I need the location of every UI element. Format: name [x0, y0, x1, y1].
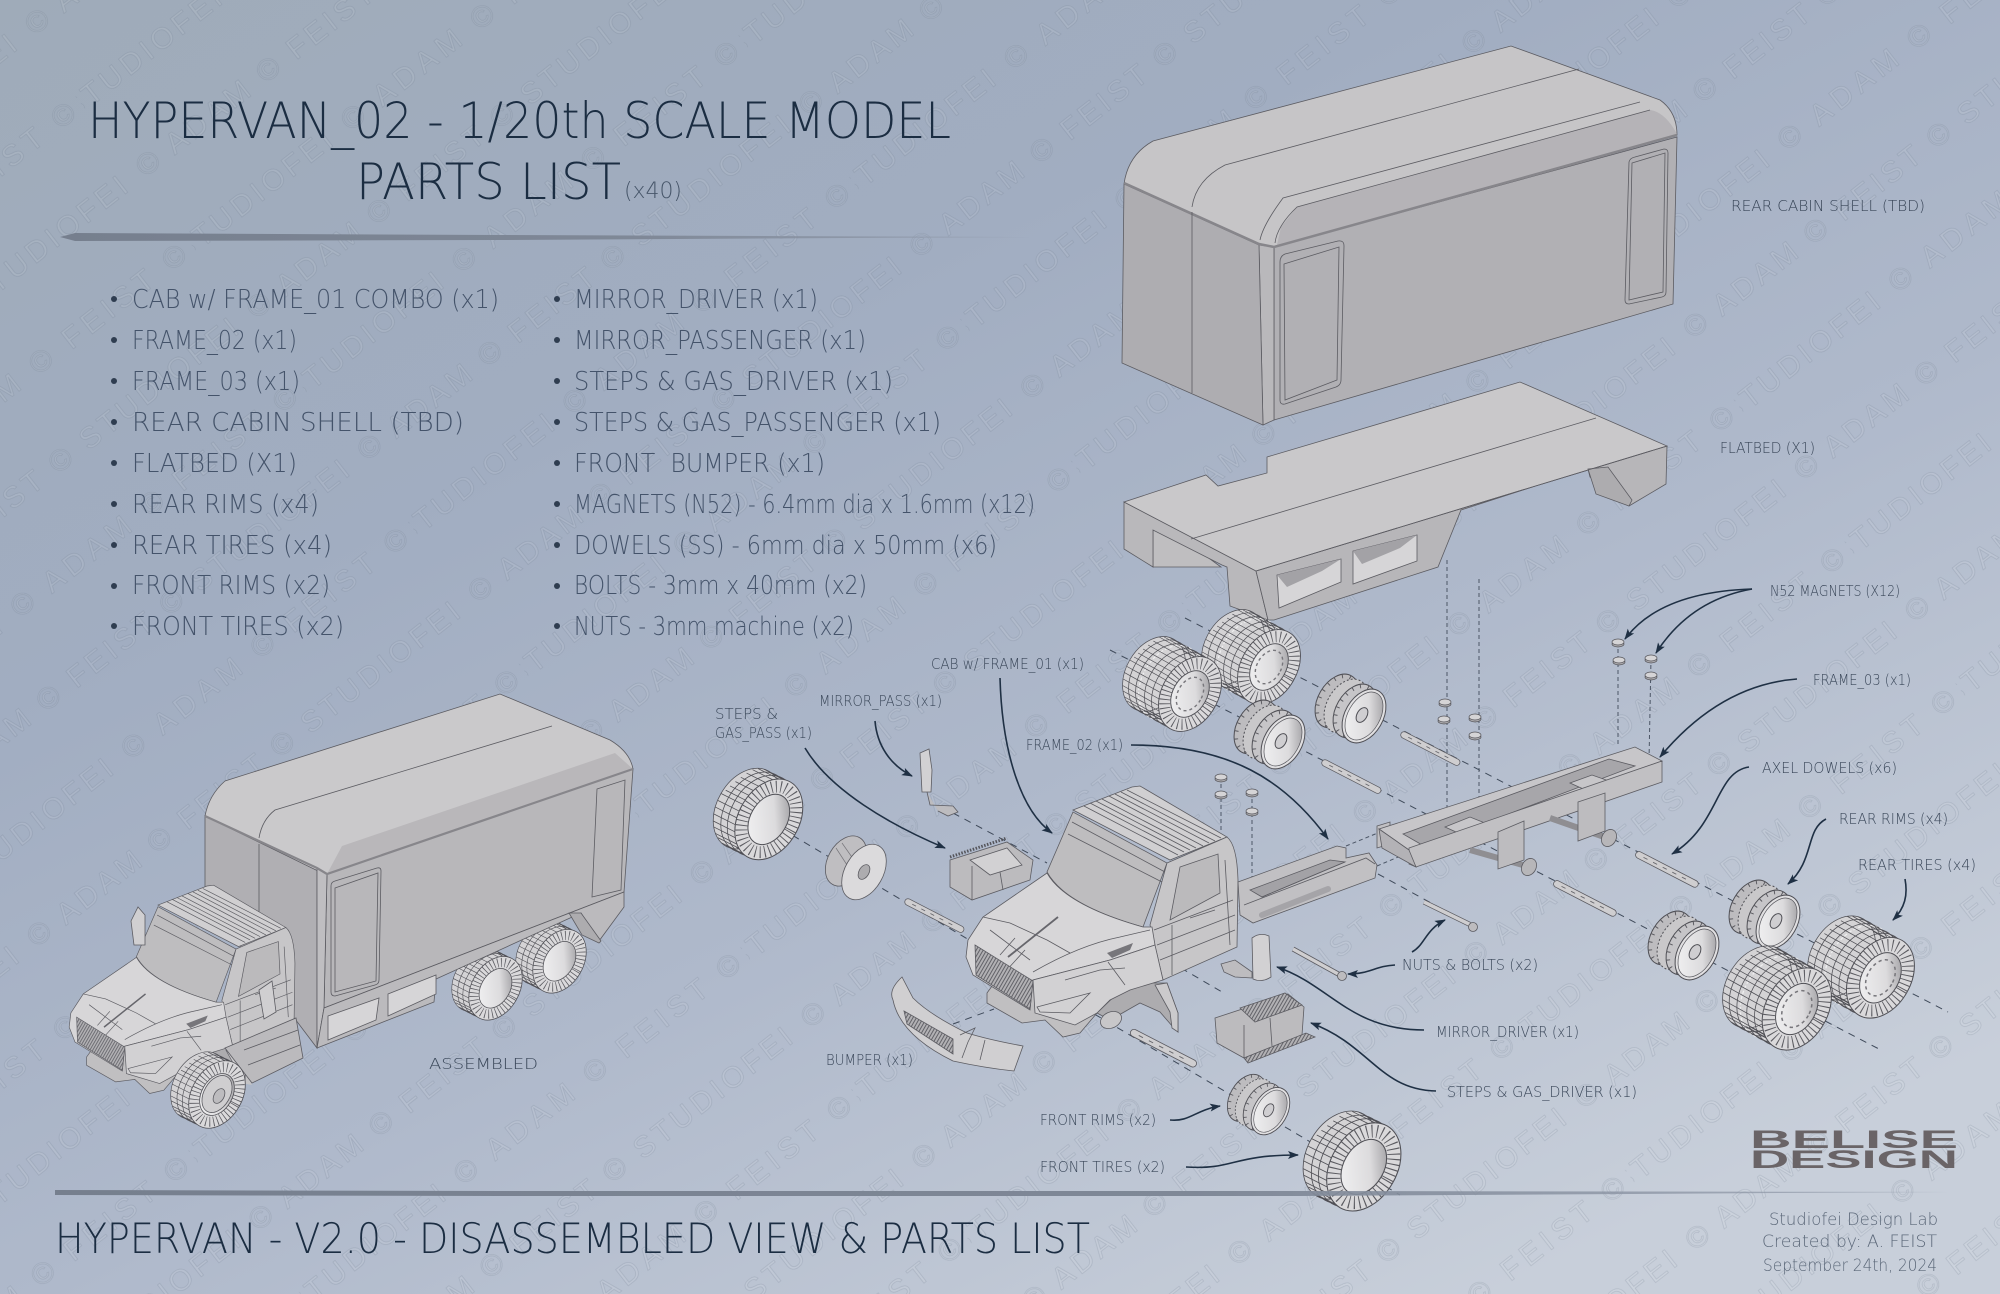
lower body fill assembled — [170, 1020, 252, 1085]
callout labels: FRONT RIMS (x2) — [1040, 1111, 1156, 1129]
parts list: right column: MIRROR_PASSENGER (x1) — [574, 326, 866, 356]
front rim — [1219, 1067, 1298, 1142]
parts list: left column: FRAME_02 (x1) — [132, 326, 297, 356]
credits — [1762, 1210, 1938, 1276]
parts list: right column: STEPS & GAS_DRIVER (x1) — [574, 367, 893, 397]
mirror assembled — [131, 907, 276, 1019]
title: (x40) — [624, 179, 682, 204]
parts list: right column: STEPS & GAS_PASSENGER (x1) — [574, 408, 941, 438]
parts list: right column: FRONT BUMPER (x1) — [574, 449, 825, 479]
passenger tire — [699, 756, 817, 872]
rear wheels assembled — [441, 911, 597, 1030]
parts list: left column: FRONT RIMS (x2) — [132, 571, 330, 601]
front tire — [1288, 1098, 1416, 1224]
credits: Studiofei Design Lab — [1769, 1210, 1938, 1230]
cab assembled — [69, 885, 295, 1094]
callout labels: STEPS & GAS_DRIVER (x1) — [1447, 1083, 1637, 1101]
bottom rule — [55, 1190, 1950, 1196]
parts list: left column: REAR CABIN SHELL (TBD) — [132, 408, 464, 438]
steps and gas passenger — [950, 838, 1033, 900]
callout labels: FLATBED (X1) — [1720, 439, 1815, 457]
mirror driver — [1221, 934, 1271, 981]
logo: BELISE — [1750, 1126, 1958, 1154]
mirror passenger — [920, 749, 958, 816]
callout arrows — [805, 589, 1906, 1167]
callout labels: FRAME_02 (x1) — [1026, 736, 1123, 754]
title: PARTS LIST — [356, 153, 621, 211]
rear cabin shell — [1122, 46, 1677, 425]
rear rims exploded — [1639, 872, 1809, 988]
callout labels: REAR CABIN SHELL (TBD) — [1731, 197, 1925, 215]
frame 02 — [1238, 822, 1390, 923]
callout labels: N52 MAGNETS (X12) — [1770, 582, 1900, 600]
parts list: right column: DOWELS (SS) - 6mm dia x 50mm (x6) — [574, 531, 997, 561]
callout labels: REAR TIRES (x4) — [1858, 856, 1976, 874]
assembled side details — [259, 726, 625, 996]
callout labels: MIRROR_PASS (x1) — [819, 692, 942, 710]
title: HYPERVAN_02 - 1/20th SCALE MODEL — [88, 92, 951, 150]
parts list: right column: MIRROR_DRIVER (x1) — [574, 285, 818, 315]
parts list: left column — [111, 285, 499, 642]
passenger rim — [817, 829, 895, 907]
label: assembled: ASSEMBLED — [429, 1055, 538, 1073]
credits: Created by: A. FEIST — [1762, 1232, 1938, 1252]
bumper — [892, 977, 1023, 1071]
parts list: left column: FRAME_03 (x1) — [132, 367, 300, 397]
callout labels: STEPS & — [715, 705, 778, 723]
logo — [1750, 1126, 1958, 1174]
cab exploded — [966, 786, 1238, 1037]
upper rear tires — [1110, 598, 1313, 743]
parts list: right column — [554, 285, 1035, 642]
parts list: right column: BOLTS - 3mm x 40mm (x2) — [574, 571, 867, 601]
frame 03 — [1379, 747, 1662, 878]
logo: DESIGN — [1750, 1146, 1958, 1174]
callout labels: NUTS & BOLTS (x2) — [1402, 956, 1538, 974]
rear cabin panels — [1280, 149, 1668, 404]
steps and gas driver — [1215, 993, 1315, 1063]
callout labels: FRONT TIRES (x2) — [1040, 1158, 1165, 1176]
callout labels: MIRROR_DRIVER (x1) — [1436, 1023, 1579, 1041]
callout labels: AXEL DOWELS (x6) — [1762, 759, 1897, 777]
parts list: left column: FLATBED (X1) — [132, 449, 297, 479]
steps assembled — [225, 1018, 303, 1083]
callout labels: CAB w/ FRAME_01 (x1) — [931, 655, 1084, 673]
dowels — [908, 735, 1695, 1063]
bottom title: HYPERVAN - V2.0 - DISASSEMBLED VIEW & PARTS LIST — [55, 1214, 1090, 1263]
callout labels: BUMPER (x1) — [826, 1051, 913, 1069]
upper rear rims — [1225, 666, 1395, 777]
title — [88, 92, 951, 211]
parts list: right column: NUTS - 3mm machine (x2) — [574, 612, 854, 642]
credits: September 24th, 2024 — [1763, 1256, 1937, 1276]
callout labels — [715, 197, 1976, 1176]
parts list: left column: FRONT TIRES (x2) — [132, 612, 344, 642]
flatbed — [1124, 382, 1667, 620]
magnets — [1215, 639, 1657, 816]
parts list: left column: REAR RIMS (x4) — [132, 490, 319, 520]
front wheel assembled — [159, 1042, 257, 1138]
exploded axis lines — [748, 560, 1948, 1195]
assembled truck — [69, 694, 633, 1138]
title rule — [60, 233, 1031, 241]
callout labels: GAS_PASS (x1) — [715, 724, 812, 742]
callout labels: REAR RIMS (x4) — [1839, 810, 1948, 828]
parts list: left column: REAR TIRES (x4) — [132, 531, 332, 561]
parts list: right column: MAGNETS (N52) - 6.4mm dia x 1.6mm (x12) — [574, 490, 1035, 520]
callout labels: FRAME_03 (x1) — [1813, 671, 1911, 689]
parts list: left column: CAB w/ FRAME_01 COMBO (x1) — [132, 285, 499, 315]
rear tires exploded — [1709, 904, 1928, 1063]
bolts — [1293, 902, 1478, 980]
